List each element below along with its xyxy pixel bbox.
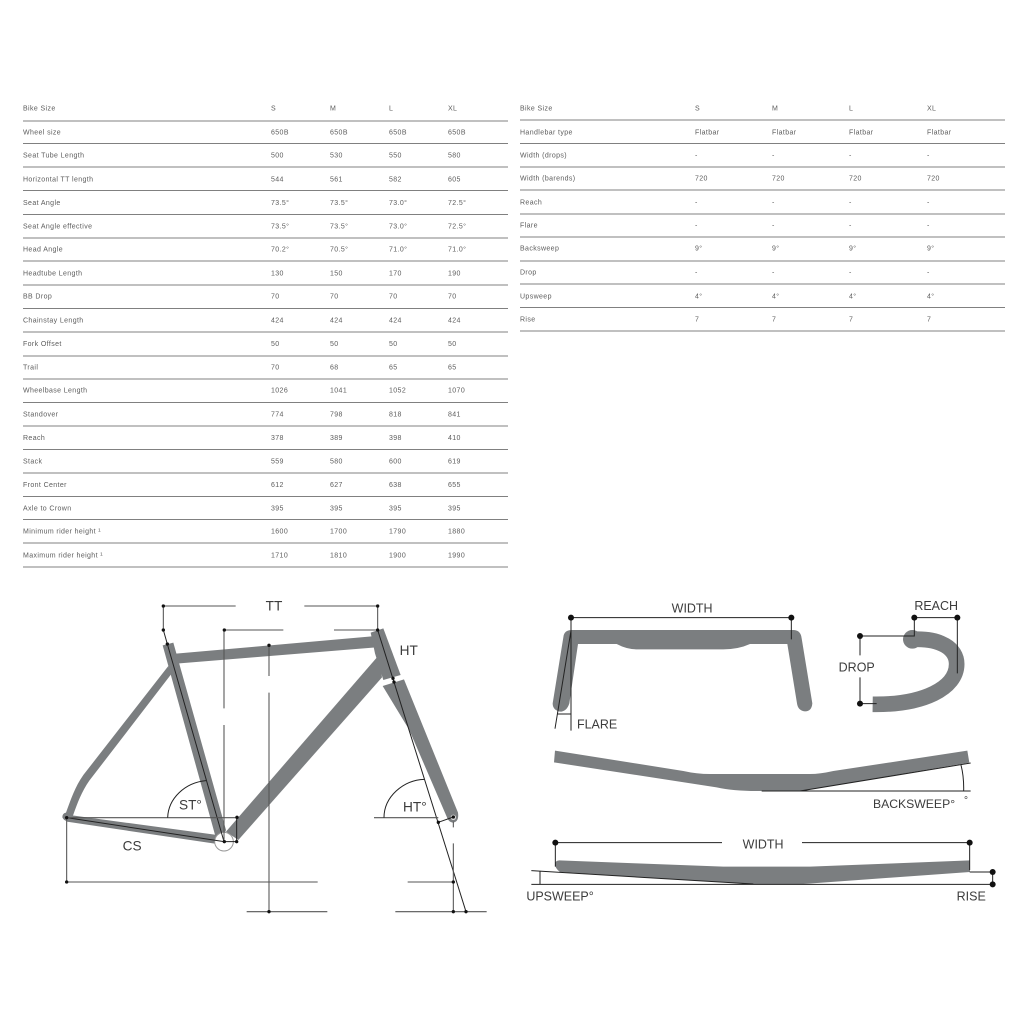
frame geometry table: Maximum rider height ¹ <box>23 552 103 559</box>
handlebar geometry table: Reach <box>520 199 542 206</box>
frame geometry table: 73.5° <box>271 199 289 207</box>
frame geometry table: Reach <box>23 435 45 442</box>
frame geometry table: 71.0° <box>389 245 407 253</box>
handlebar geometry table: - <box>695 222 698 229</box>
frame geometry table: 798 <box>330 411 343 418</box>
frame geometry table: 582 <box>389 176 402 183</box>
handlebar geometry table: 4° <box>927 292 934 300</box>
frame geometry table: 73.0° <box>389 199 407 207</box>
handlebar geometry table: 720 <box>695 175 708 182</box>
label: HT: HT <box>400 643 419 658</box>
handlebar geometry table: - <box>772 269 775 276</box>
handlebar geometry table: - <box>849 199 852 206</box>
handlebar geometry table: - <box>927 269 930 276</box>
handlebar side view <box>857 615 960 707</box>
frame geometry table: Chainstay Length <box>23 317 84 324</box>
handlebar geometry table: - <box>927 199 930 206</box>
handlebar geometry table: 4° <box>695 292 702 300</box>
handlebar geometry table: Backsweep <box>520 245 559 252</box>
frame geometry table: 655 <box>448 482 461 489</box>
handlebar geometry table: 9° <box>849 244 856 252</box>
handlebar geometry table: - <box>695 152 698 159</box>
frame geometry table: Fork Offset <box>23 341 62 348</box>
frame geometry table: 71.0° <box>448 245 466 253</box>
frame geometry table: 550 <box>389 152 402 159</box>
handlebar geometry table: 9° <box>927 244 934 252</box>
frame geometry table: 424 <box>271 317 284 324</box>
handlebar geometry table: XL <box>927 105 936 112</box>
frame geometry table: 73.5° <box>271 222 289 230</box>
frame geometry table: 65 <box>448 364 457 371</box>
frame geometry table: 605 <box>448 176 461 183</box>
label: drop: DROP <box>839 660 875 674</box>
frame geometry table: 612 <box>271 482 284 489</box>
label: CS: CS <box>123 839 142 854</box>
measurement points <box>65 604 468 913</box>
frame geometry table: Headtube Length <box>23 270 82 277</box>
frame geometry table: 72.5° <box>448 199 466 207</box>
bottom bracket <box>215 832 233 851</box>
frame geometry table: Seat Angle <box>23 200 61 207</box>
frame geometry table: 50 <box>271 341 280 348</box>
frame geometry table: 73.5° <box>330 199 348 207</box>
frame geometry table: 841 <box>448 411 461 418</box>
frame geometry table: 1990 <box>448 552 465 559</box>
handlebar geometry table: - <box>849 269 852 276</box>
frame geometry table: 389 <box>330 435 343 442</box>
angle arcs <box>168 779 424 818</box>
handlebar geometry table: 9° <box>772 244 779 252</box>
frame geometry table: Standover <box>23 411 59 418</box>
handlebar geometry table: - <box>695 269 698 276</box>
frame geometry table: Wheelbase Length <box>23 387 87 394</box>
label: degree mark: ° <box>964 795 968 806</box>
frame geometry table: 650B <box>330 129 348 136</box>
frame geometry table: 818 <box>389 411 402 418</box>
frame geometry table: 500 <box>271 152 284 159</box>
frame geometry table: 559 <box>271 458 284 465</box>
frame geometry table: 1810 <box>330 552 347 559</box>
frame geometry table: 1700 <box>330 528 347 535</box>
frame geometry table: L <box>389 105 393 112</box>
frame geometry table: 70 <box>448 293 457 300</box>
handlebar geometry table <box>520 105 1005 331</box>
handlebar geometry table: 9° <box>695 244 702 252</box>
label: ST degrees: ST° <box>179 797 202 812</box>
frame geometry table: 1790 <box>389 528 406 535</box>
frame geometry table: Seat Angle effective <box>23 223 92 230</box>
frame geometry table: 1052 <box>389 387 406 394</box>
handlebar geometry table: Flatbar <box>695 129 720 136</box>
frame geometry table: 70 <box>389 293 398 300</box>
label: upsweep: UPSWEEP° <box>526 890 594 904</box>
frame geometry table: 1070 <box>448 387 465 394</box>
frame geometry table: 395 <box>448 505 461 512</box>
frame geometry table: Axle to Crown <box>23 505 72 512</box>
frame geometry table: 580 <box>448 152 461 159</box>
label: HT degrees: HT° <box>403 799 427 814</box>
handlebar geometry table: L <box>849 105 853 112</box>
frame geometry table: 410 <box>448 435 461 442</box>
handlebar geometry table: Flare <box>520 222 538 229</box>
handlebar geometry table: - <box>772 222 775 229</box>
frame geometry table: 1026 <box>271 387 288 394</box>
handlebar geometry table: S <box>695 105 700 112</box>
handlebar geometry table: - <box>927 222 930 229</box>
frame geometry table: 561 <box>330 176 343 183</box>
frame geometry table: 1880 <box>448 528 465 535</box>
handlebar geometry table: M <box>772 105 778 112</box>
frame tubes <box>62 628 458 844</box>
dimension lines <box>67 630 466 912</box>
frame geometry table: M <box>330 105 336 112</box>
handlebar geometry table: 720 <box>772 175 785 182</box>
frame geometry table: 170 <box>389 270 402 277</box>
handlebar geometry table: Bike Size <box>520 105 553 112</box>
frame geometry table: 619 <box>448 458 461 465</box>
frame geometry table: 150 <box>330 270 343 277</box>
handlebar geometry table: - <box>927 152 930 159</box>
handlebar geometry table: - <box>772 152 775 159</box>
frame geometry table: 650B <box>448 129 466 136</box>
frame geometry table: 73.5° <box>330 222 348 230</box>
frame geometry table: 72.5° <box>448 222 466 230</box>
handlebar geometry table: 720 <box>927 175 940 182</box>
frame geometry table: XL <box>448 105 457 112</box>
frame geometry table: 190 <box>448 270 461 277</box>
frame geometry table: 50 <box>448 341 457 348</box>
handlebar diagrams <box>526 599 996 904</box>
handlebar geometry table: 4° <box>772 292 779 300</box>
label: width top: WIDTH <box>672 602 713 616</box>
handlebar geometry table: 7 <box>927 316 931 323</box>
handlebar geometry table: Width (barends) <box>520 175 576 182</box>
frame geometry table: 70 <box>330 293 339 300</box>
frame geometry table: 530 <box>330 152 343 159</box>
frame geometry table: Wheel size <box>23 129 61 136</box>
frame geometry table: Minimum rider height ¹ <box>23 528 101 535</box>
handlebar geometry table: 7 <box>695 316 699 323</box>
frame geometry table: 50 <box>389 341 398 348</box>
frame geometry table: 1900 <box>389 552 406 559</box>
frame geometry table: 774 <box>271 411 284 418</box>
handlebar geometry table: Upsweep <box>520 293 552 300</box>
bike frame diagram <box>62 599 487 913</box>
frame geometry table: 395 <box>330 505 343 512</box>
frame geometry table: 638 <box>389 482 402 489</box>
label: TT: TT <box>266 599 283 614</box>
frame geometry table: 68 <box>330 364 339 371</box>
frame geometry table: 1600 <box>271 528 288 535</box>
label: reach: REACH <box>914 599 958 613</box>
handlebar geometry table: 720 <box>849 175 862 182</box>
handlebar geometry table: Width (drops) <box>520 152 567 159</box>
label: width bottom: WIDTH <box>743 837 784 851</box>
frame geometry table: 627 <box>330 482 343 489</box>
handlebar geometry table: Flatbar <box>772 129 797 136</box>
handlebar geometry table: Flatbar <box>849 129 874 136</box>
label: backsweep: BACKSWEEP° <box>873 797 955 811</box>
frame geometry table: 70 <box>271 364 280 371</box>
frame geometry table: 73.0° <box>389 222 407 230</box>
handlebar geometry table: Flatbar <box>927 129 952 136</box>
frame geometry table: 424 <box>330 317 343 324</box>
handlebar top view <box>554 751 971 791</box>
frame geometry table: 1710 <box>271 552 288 559</box>
frame geometry table: S <box>271 105 276 112</box>
handlebar geometry table: - <box>849 152 852 159</box>
frame geometry table: 65 <box>389 364 398 371</box>
frame geometry table: 544 <box>271 176 284 183</box>
frame geometry table: 424 <box>389 317 402 324</box>
frame geometry table: 1041 <box>330 387 347 394</box>
frame geometry table: 70 <box>271 293 280 300</box>
frame geometry table: 580 <box>330 458 343 465</box>
frame geometry table: 600 <box>389 458 402 465</box>
frame geometry table: Stack <box>23 458 43 465</box>
handlebar geometry table: 7 <box>849 316 853 323</box>
handlebar geometry table: - <box>695 199 698 206</box>
frame geometry table: Horizontal TT length <box>23 176 93 183</box>
frame geometry table <box>23 105 508 567</box>
frame geometry table: Trail <box>23 364 38 371</box>
label: flare: FLARE <box>577 718 617 732</box>
frame geometry table: 50 <box>330 341 339 348</box>
frame geometry table: 650B <box>271 129 289 136</box>
handlebar geometry table: Handlebar type <box>520 129 573 136</box>
frame geometry table: 70.5° <box>330 245 348 253</box>
frame geometry table: 378 <box>271 435 284 442</box>
frame geometry table: 395 <box>271 505 284 512</box>
frame geometry table: 130 <box>271 270 284 277</box>
frame geometry table: 70.2° <box>271 245 289 253</box>
handlebar geometry table: - <box>849 222 852 229</box>
handlebar geometry table: 4° <box>849 292 856 300</box>
frame geometry table: Seat Tube Length <box>23 152 84 159</box>
frame geometry table: BB Drop <box>23 293 52 300</box>
frame geometry table: 650B <box>389 129 407 136</box>
handlebar geometry table: 7 <box>772 316 776 323</box>
label: rise: RISE <box>957 890 986 904</box>
handlebar geometry table: - <box>772 199 775 206</box>
frame geometry table: 424 <box>448 317 461 324</box>
handlebar geometry table: Drop <box>520 269 537 276</box>
frame geometry table: 395 <box>389 505 402 512</box>
handlebar front view <box>553 615 812 731</box>
handlebar geometry table: Rise <box>520 316 536 323</box>
frame geometry table: 398 <box>389 435 402 442</box>
frame geometry table: Head Angle <box>23 246 63 253</box>
frame geometry table: Bike Size <box>23 105 56 112</box>
frame geometry table: Front Center <box>23 482 67 489</box>
handlebar rear view <box>531 840 996 887</box>
